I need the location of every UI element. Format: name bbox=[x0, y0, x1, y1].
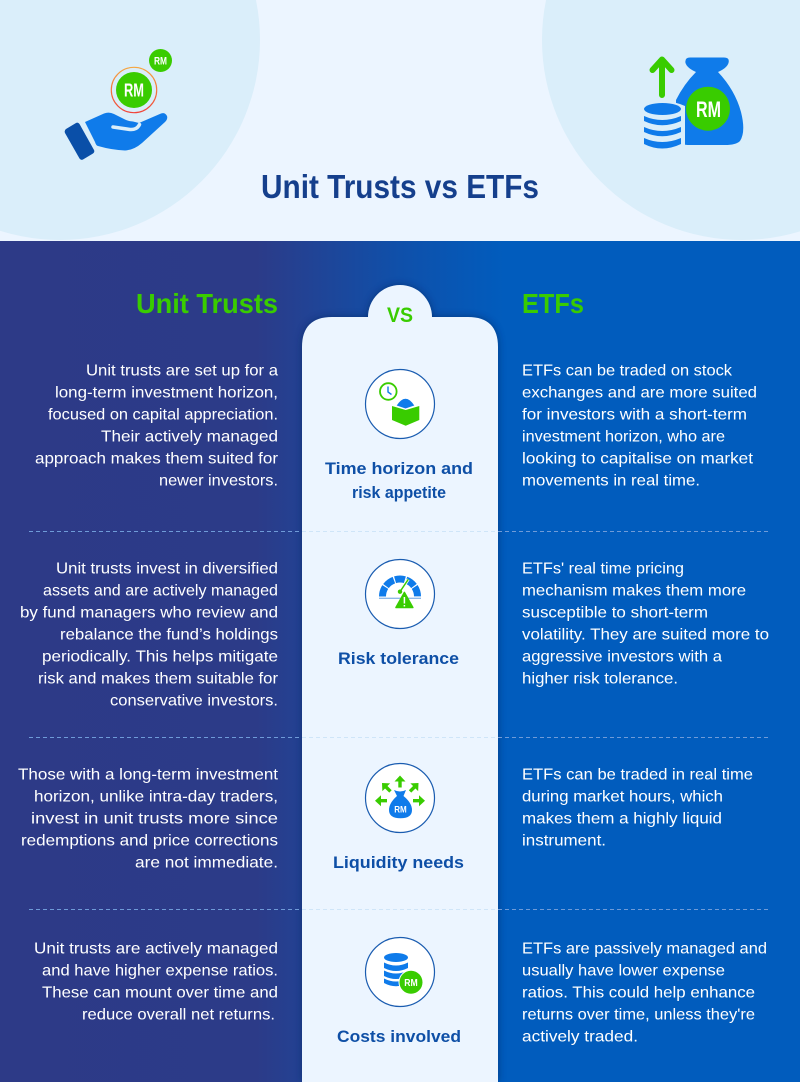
row 3 right text: during market hours, which bbox=[522, 788, 723, 806]
row 2 left text: conservative investors. bbox=[110, 692, 278, 710]
icon: money bag with coin stack and up arrow bbox=[640, 58, 743, 152]
row 2 left text: by fund managers who review and bbox=[20, 604, 278, 622]
row 3 left text: Those with a long-term investment bbox=[18, 766, 279, 784]
row 2 icon: risk gauge with warning bbox=[366, 560, 434, 628]
row 3 right text: instrument. bbox=[522, 832, 606, 850]
row 1 right text: looking to capitalise on market bbox=[522, 450, 754, 468]
column heading: Unit Trusts: Unit Trusts bbox=[136, 288, 278, 319]
row 3 left text: horizon, unlike intra-day traders, bbox=[34, 788, 278, 806]
gradient comparison background bbox=[0, 241, 800, 1082]
row 1 left text: focused on capital appreciation. bbox=[48, 406, 278, 424]
row 4 right text: returns over time, unless they're bbox=[522, 1006, 755, 1024]
row 3 right text: ETFs can be traded in real time bbox=[522, 766, 753, 784]
row 1 left text: Unit trusts are set up for a bbox=[86, 362, 278, 380]
row 2 left text: rebalance the fund’s holdings bbox=[60, 626, 278, 644]
row 1 right text: investment horizon, who are bbox=[522, 428, 725, 446]
row 1 right text bbox=[522, 362, 757, 490]
row 4 right text: usually have lower expense bbox=[522, 962, 725, 980]
row 1 right text: movements in real time. bbox=[522, 472, 700, 490]
row 4 left text: These can mount over time and bbox=[42, 984, 278, 1002]
row 4 left text: and have higher expense ratios. bbox=[42, 962, 278, 980]
row 2 right text: higher risk tolerance. bbox=[522, 670, 678, 688]
row 3 right text bbox=[522, 766, 753, 850]
row dividers bbox=[29, 532, 770, 910]
VS label: VS bbox=[387, 304, 413, 327]
row 3 icon: money bag with outward arrows bbox=[366, 764, 434, 832]
row 1 left text: approach makes them suited for bbox=[35, 450, 279, 468]
row 1 label: Time horizon and bbox=[325, 459, 473, 478]
row 4 right text bbox=[522, 940, 767, 1046]
row 3 icon: money bag with outward arrows: RM bbox=[394, 804, 407, 814]
row 2 left text: assets and are actively managed bbox=[43, 582, 278, 600]
row 2 right text: aggressive investors with a bbox=[522, 648, 722, 666]
row 1 icon: clock and book bbox=[366, 370, 434, 438]
row 2 right text: ETFs' real time pricing bbox=[522, 560, 684, 578]
row 3 left text: are not immediate. bbox=[135, 854, 278, 872]
title: Unit Trusts vs ETFs bbox=[261, 168, 539, 205]
row 3 label: Liquidity needs bbox=[333, 853, 464, 872]
row 1 left text: long-term investment horizon, bbox=[55, 384, 278, 402]
row 4 right text: ETFs are passively managed and bbox=[522, 940, 767, 958]
row 2 right text: susceptible to short-term bbox=[522, 604, 708, 622]
row 4 left text bbox=[34, 940, 278, 1024]
row 2 right text bbox=[522, 560, 769, 688]
row 4 icon: coin stack with RM coin: RM bbox=[404, 977, 418, 989]
row 1 right text: for investors with a short-term bbox=[522, 406, 747, 424]
row 1 left text bbox=[35, 362, 279, 490]
row 1 label: risk appetite bbox=[352, 483, 446, 502]
icon: hand receiving RM coins bbox=[65, 49, 172, 160]
row 2 right text: mechanism makes them more bbox=[522, 582, 746, 600]
row 4 left text: Unit trusts are actively managed bbox=[34, 940, 278, 958]
row 4 left text: reduce overall net returns. bbox=[82, 1006, 275, 1024]
row 1 right text: exchanges and are more suited bbox=[522, 384, 757, 402]
row 2 left text bbox=[20, 560, 279, 710]
row 2 label: Risk tolerance bbox=[338, 649, 459, 668]
row 2 left text: Unit trusts invest in diversified bbox=[56, 560, 278, 578]
row 3 left text bbox=[18, 766, 279, 872]
row 4 right text: actively traded. bbox=[522, 1028, 638, 1046]
row 4 label: Costs involved bbox=[337, 1027, 461, 1046]
row 1 right text: ETFs can be traded on stock bbox=[522, 362, 733, 380]
row 1 left text: Their actively managed bbox=[101, 428, 278, 446]
icon: money bag with coin stack and up arrow: RM bbox=[696, 97, 721, 122]
row 3 right text: makes them a highly liquid bbox=[522, 810, 722, 828]
icon: hand receiving RM coins: RM bbox=[124, 80, 144, 100]
row 2 left text: periodically. This helps mitigate bbox=[42, 648, 278, 666]
row 3 left text: redemptions and price corrections bbox=[21, 832, 278, 850]
row 4 icon: coin stack with RM coin bbox=[366, 938, 434, 1006]
row 3 left text: invest in unit trusts more since bbox=[31, 810, 278, 828]
icon: hand receiving RM coins: RM bbox=[154, 56, 167, 68]
row 1 left text: newer investors. bbox=[159, 472, 278, 490]
row 1 label bbox=[325, 459, 473, 502]
header background bbox=[0, 0, 800, 241]
row 4 right text: ratios. This could help enhance bbox=[522, 984, 755, 1002]
row 2 left text: risk and makes them suitable for bbox=[38, 670, 279, 688]
column heading: ETFs: ETFs bbox=[522, 288, 584, 319]
row 2 right text: volatility. They are suited more to bbox=[522, 626, 769, 644]
centre panel with VS tab bbox=[302, 285, 498, 1082]
